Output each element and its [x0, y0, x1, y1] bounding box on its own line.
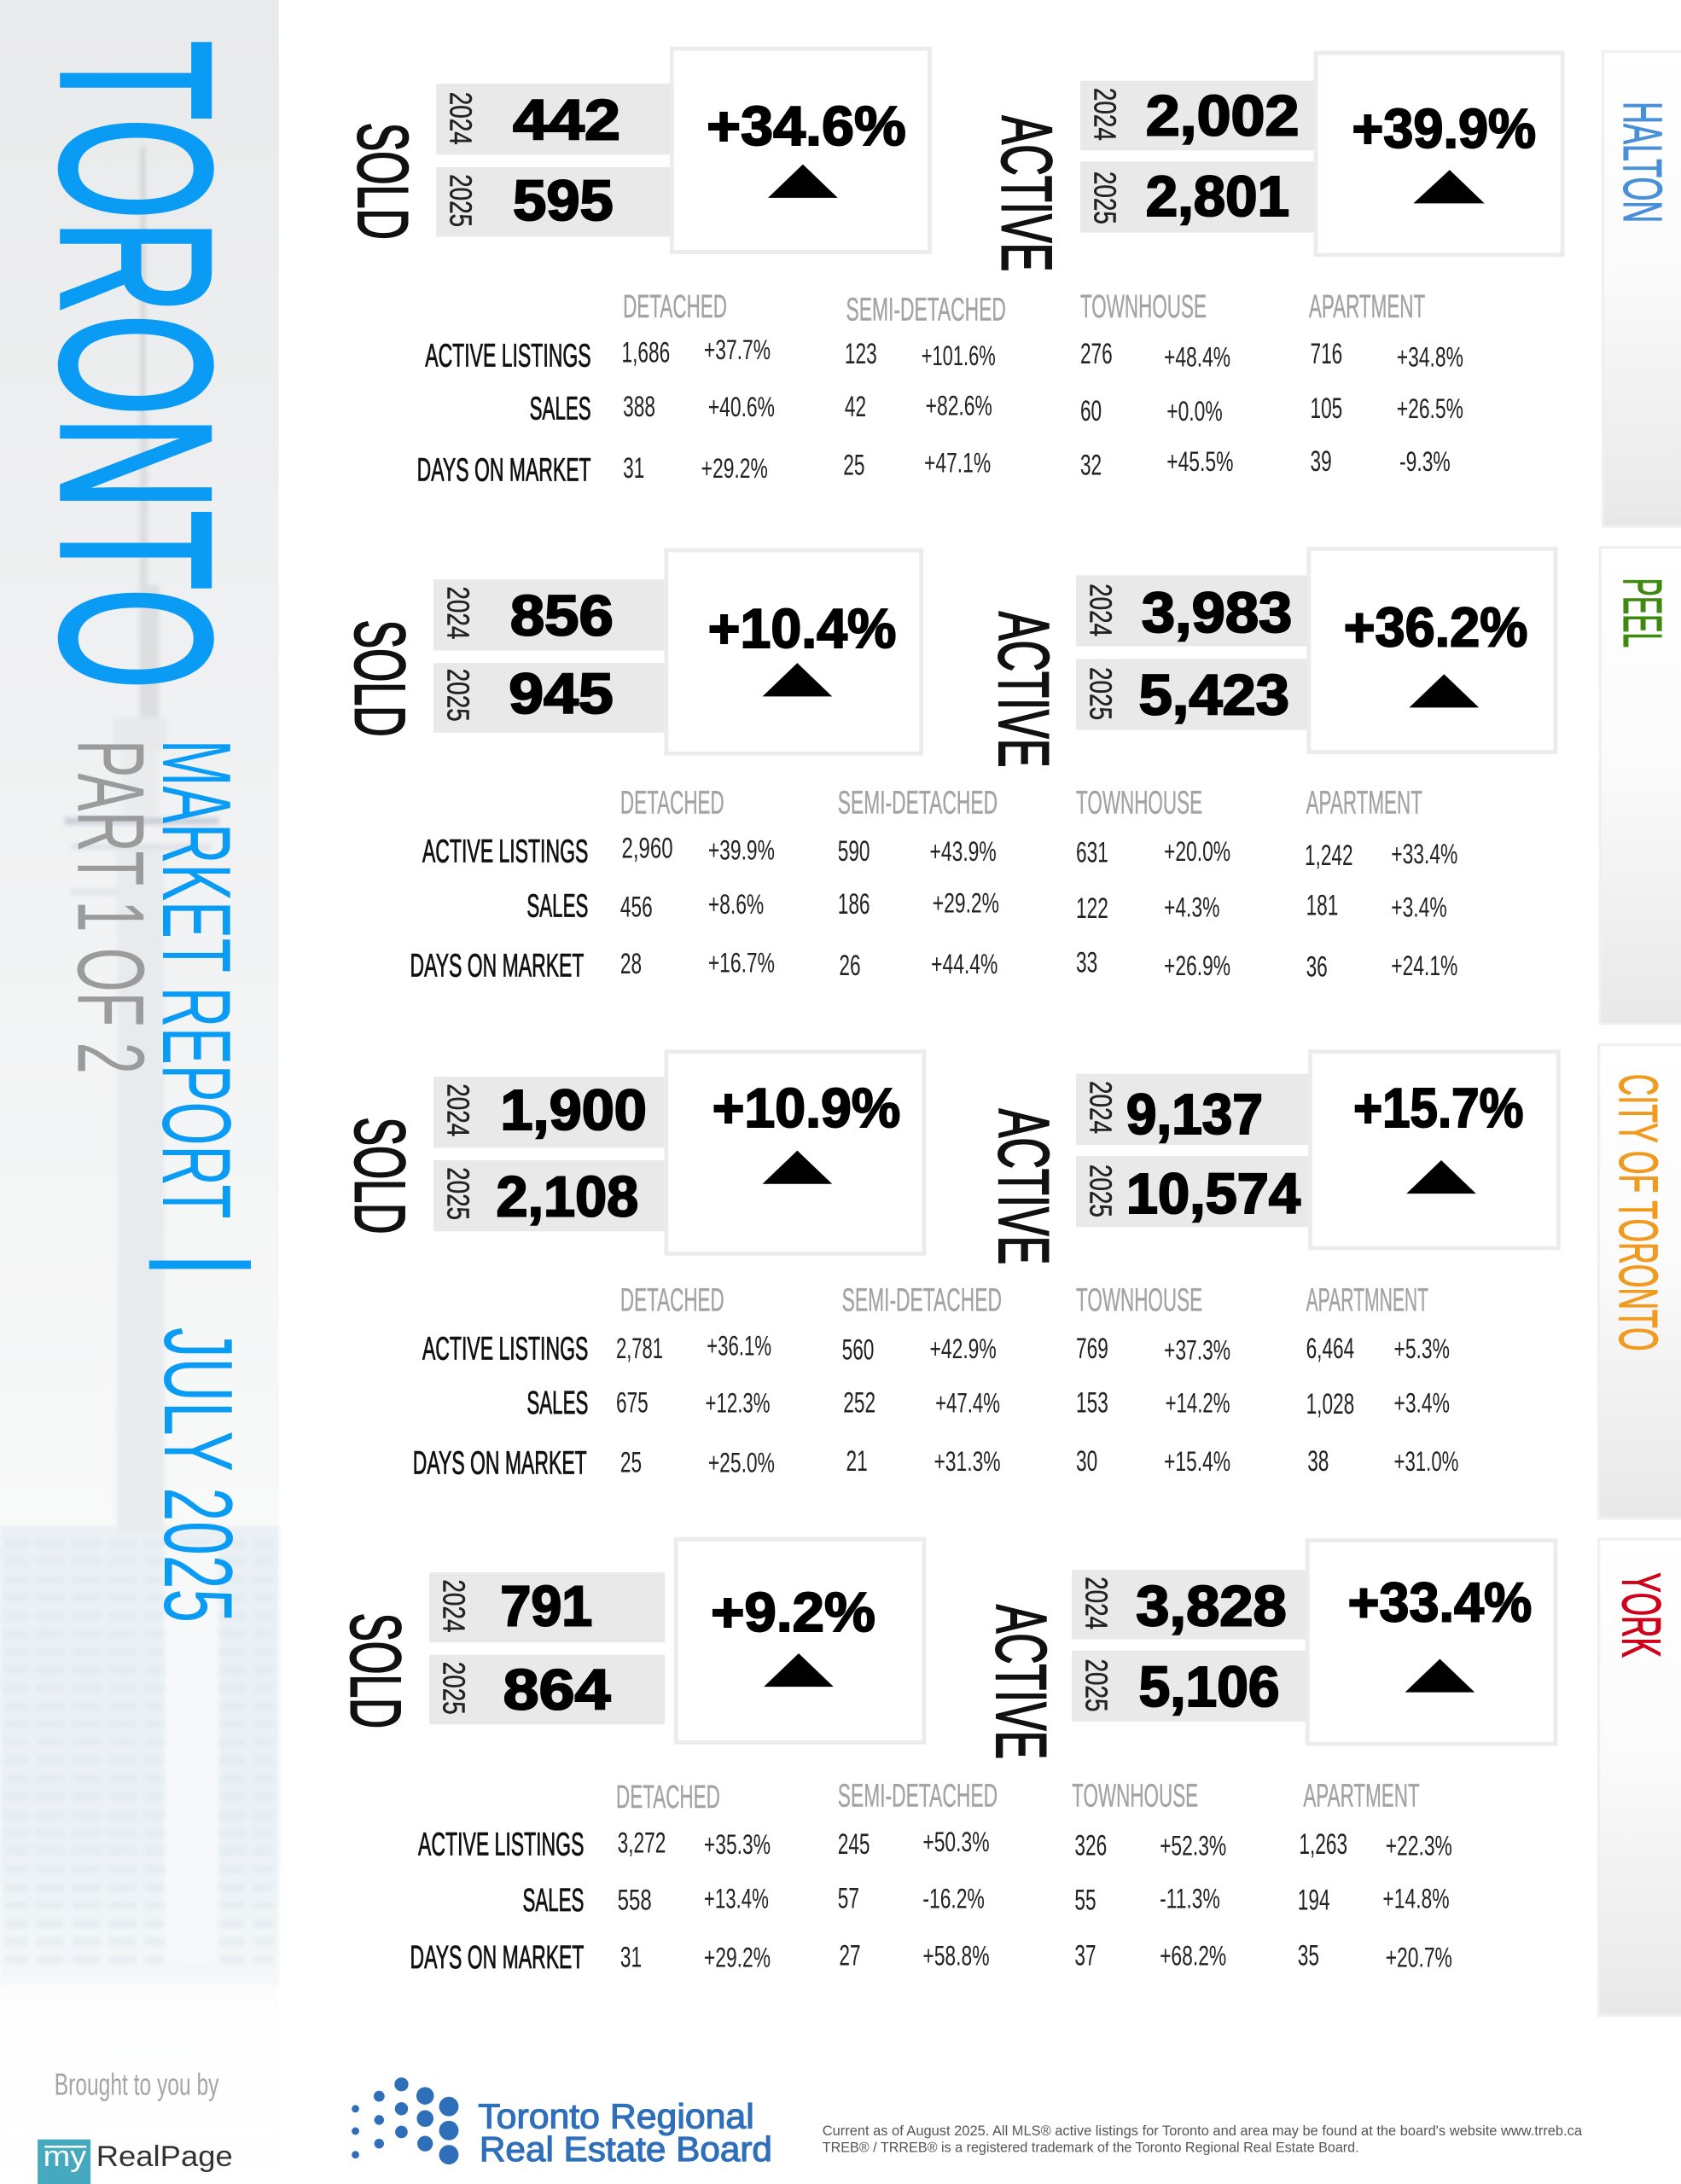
sold card: 791 — [500, 1574, 592, 1638]
table: property types: +12.3% — [706, 1387, 770, 1419]
active card: +36.2% — [1344, 596, 1527, 659]
region tab: York: YORK — [1610, 1572, 1671, 1658]
sold card: 2024 — [444, 92, 479, 145]
footnote: Current as of August 2025. All MLS® active listings for Toronto and area may be found at the board's website www.trreb.ca — [823, 2123, 1583, 2139]
table: property types: TOWNHOUSE — [1076, 1281, 1202, 1318]
active card: 2,801 — [1146, 165, 1289, 229]
table: property types: +26.5% — [1397, 392, 1463, 424]
sold card: 2024 — [436, 1579, 471, 1632]
sold card: 1,900 — [500, 1078, 647, 1142]
footnote — [823, 2123, 1583, 2155]
table: property types: -16.2% — [922, 1883, 985, 1914]
table: property types: 31 — [623, 452, 644, 485]
table: property types: 122 — [1076, 892, 1108, 925]
table: property types: +26.9% — [1164, 950, 1230, 981]
sold card: 595 — [513, 169, 614, 233]
active card: 3,828 — [1136, 1574, 1287, 1638]
active card — [986, 53, 1562, 271]
table: property types: 1,242 — [1305, 839, 1353, 872]
table: property types: 769 — [1076, 1333, 1108, 1365]
active card: ACTIVE — [981, 1605, 1061, 1759]
logo: myRealPage: my — [44, 2140, 87, 2173]
region tab: Halton — [1603, 51, 1681, 526]
table: property types: +31.0% — [1393, 1446, 1458, 1477]
image: blurred CN Tower — [64, 146, 218, 1532]
table: property types — [413, 1281, 1458, 1481]
table: property types: +14.2% — [1166, 1387, 1230, 1419]
table: property types: DAYS ON MARKET — [410, 948, 584, 984]
table: property types: DETACHED — [623, 288, 727, 325]
table: property types: DETACHED — [620, 1281, 724, 1318]
table: property types: 2,960 — [622, 833, 673, 865]
sold card: 945 — [509, 662, 614, 726]
sold card: +34.6% — [707, 95, 906, 157]
table: property types: +48.4% — [1164, 340, 1230, 372]
table: property types: 276 — [1080, 339, 1113, 370]
table: property types: 37 — [1074, 1940, 1096, 1972]
table: property types: +29.2% — [704, 1941, 771, 1972]
table: property types: 186 — [838, 889, 870, 921]
active card: 10,574 — [1126, 1162, 1300, 1226]
table: property types: 35 — [1298, 1940, 1319, 1972]
table: property types: +58.8% — [922, 1940, 990, 1972]
sold card — [336, 1539, 924, 1742]
table: property types: +34.8% — [1397, 340, 1463, 372]
table: property types: +35.3% — [704, 1828, 771, 1860]
active card — [981, 1541, 1556, 1759]
table: property types: APARTMENT — [1309, 288, 1425, 325]
table: property types: 42 — [845, 392, 866, 423]
active card: 2024 — [1083, 584, 1118, 636]
table: property types: +3.4% — [1391, 891, 1447, 922]
active card — [984, 1052, 1558, 1264]
table: property types: 123 — [845, 339, 877, 370]
table: property types: 33 — [1076, 947, 1097, 979]
sold card: SOLD — [336, 1613, 416, 1728]
panel: sidebar background with CN Tower — [0, 0, 279, 2184]
sold card: 2025 — [444, 174, 479, 227]
footer: brought to you by: Brought to you by — [55, 2067, 218, 2102]
divider bar — [149, 1261, 251, 1269]
table: property types: 558 — [618, 1884, 652, 1916]
table: property types: ACTIVE LISTINGS — [422, 834, 588, 869]
table: property types: +25.0% — [708, 1447, 775, 1478]
sold card: SOLD — [340, 1117, 420, 1234]
table: property types — [417, 288, 1463, 488]
sold card — [340, 1052, 924, 1253]
table: property types: 388 — [623, 392, 655, 423]
table: property types: DAYS ON MARKET — [413, 1445, 587, 1481]
table: property types: 39 — [1310, 445, 1332, 478]
active card: 2024 — [1079, 1577, 1114, 1629]
table: property types: 27 — [839, 1940, 861, 1972]
logo: myRealPage — [38, 2140, 233, 2184]
table: property types: TOWNHOUSE — [1076, 784, 1202, 821]
table: property types: SALES — [530, 390, 591, 427]
logo: Toronto Regional Real Estate Board — [352, 2077, 772, 2169]
table: property types: +4.3% — [1164, 891, 1219, 922]
active card: ACTIVE — [986, 116, 1067, 271]
sold card: 2025 — [440, 1167, 475, 1220]
table: property types: -11.3% — [1160, 1883, 1220, 1914]
table: property types: 25 — [843, 450, 864, 482]
active card: 2024 — [1087, 88, 1122, 141]
table: property types: +42.9% — [930, 1333, 997, 1364]
panel: Peel — [340, 548, 1681, 1024]
sold card: 2025 — [440, 669, 475, 722]
active card: ACTIVE — [984, 1109, 1063, 1264]
table: property types: 1,263 — [1299, 1829, 1347, 1861]
image: blurred city skyline — [0, 1526, 279, 2184]
table: property types: 57 — [838, 1883, 859, 1915]
table: property types: +3.4% — [1393, 1386, 1450, 1418]
subtitle: date: JULY 2025 — [143, 1327, 252, 1623]
table: property types: 181 — [1306, 890, 1338, 922]
table: property types: 675 — [616, 1387, 649, 1420]
sold card: 442 — [513, 88, 620, 152]
table: property types: 716 — [1310, 339, 1342, 370]
table: property types: 1,686 — [622, 337, 670, 369]
sold card: 856 — [510, 584, 614, 648]
table: property types: +50.3% — [922, 1826, 990, 1857]
sold card: +10.4% — [708, 597, 896, 659]
table: property types: +0.0% — [1166, 395, 1223, 427]
active card: 2025 — [1083, 667, 1118, 720]
table: property types: +5.3% — [1393, 1333, 1450, 1364]
sold card: 2,108 — [497, 1165, 638, 1228]
table: property types: 55 — [1074, 1885, 1096, 1917]
region tab: City of Toronto — [1599, 1044, 1681, 1519]
table: property types: DETACHED — [620, 784, 724, 821]
table: property types: +39.9% — [708, 834, 775, 865]
table: property types: +47.4% — [935, 1387, 1000, 1419]
table: property types: -9.3% — [1399, 445, 1451, 477]
logo: Toronto Regional Real Estate Board: Real Estate Board — [480, 2129, 772, 2169]
table: property types: 1,028 — [1306, 1389, 1354, 1420]
table: property types: 194 — [1298, 1885, 1330, 1917]
logo: Toronto Regional Real Estate Board: Toronto Regional — [478, 2097, 754, 2136]
table: property types — [410, 1776, 1452, 1975]
table: property types: +68.2% — [1160, 1940, 1226, 1972]
table: property types: +52.3% — [1160, 1830, 1226, 1862]
table: property types: +16.7% — [708, 946, 775, 979]
table: property types: +36.1% — [707, 1330, 771, 1362]
active card: 5,106 — [1139, 1655, 1280, 1719]
table: property types: ACTIVE LISTINGS — [425, 338, 591, 374]
logo: myRealPage: RealPage — [96, 2140, 233, 2173]
table: property types: TOWNHOUSE — [1080, 288, 1207, 325]
table: property types: 31 — [620, 1942, 642, 1974]
active card: 9,137 — [1126, 1083, 1263, 1147]
active card — [984, 549, 1556, 768]
table: property types: 28 — [620, 949, 642, 980]
table: property types: +44.4% — [931, 948, 998, 979]
table: property types: 2,781 — [616, 1333, 663, 1365]
table: property types: TOWNHOUSE — [1072, 1777, 1198, 1814]
table: property types: +82.6% — [926, 389, 992, 421]
table: property types: APARTMENT — [1303, 1777, 1420, 1814]
table: property types: 252 — [843, 1387, 875, 1420]
subtitle: market report: MARKET REPORT — [142, 740, 250, 1219]
sold card: 2024 — [440, 1083, 475, 1136]
table: property types: +37.7% — [704, 334, 771, 365]
table: property types: +40.6% — [708, 391, 775, 422]
active card: 2025 — [1083, 1165, 1118, 1217]
panel: City of Toronto — [340, 1044, 1681, 1519]
table: property types: DAYS ON MARKET — [410, 1939, 584, 1975]
table: property types: 456 — [620, 892, 653, 924]
table: property types: SEMI-DETACHED — [838, 1776, 998, 1814]
table: property types: +29.2% — [701, 452, 768, 484]
sold card: 2025 — [436, 1662, 471, 1715]
table: property types: +20.7% — [1386, 1941, 1452, 1972]
table: property types: 153 — [1076, 1387, 1108, 1420]
table: property types: 631 — [1076, 837, 1108, 869]
table: property types: 30 — [1076, 1446, 1097, 1478]
table: property types: 26 — [839, 950, 861, 982]
sold card — [343, 49, 930, 253]
table: property types: +22.3% — [1386, 1830, 1452, 1862]
table: property types: SEMI-DETACHED — [846, 290, 1006, 328]
sold card: SOLD — [340, 620, 420, 737]
table: property types: 32 — [1080, 450, 1102, 482]
active card: 3,983 — [1142, 581, 1292, 645]
panel: York — [336, 1539, 1681, 2015]
table: property types: SEMI-DETACHED — [838, 783, 998, 821]
active card: +33.4% — [1348, 1571, 1532, 1633]
sold card: SOLD — [343, 123, 422, 240]
table: property types: +24.1% — [1391, 950, 1457, 981]
table: property types: 6,464 — [1306, 1333, 1354, 1365]
table: property types: APARTMNENT — [1306, 1281, 1428, 1318]
title: TORONTO: TORONTO — [16, 40, 256, 689]
sold card: +9.2% — [711, 1581, 875, 1643]
region tab: Peel: PEEL — [1612, 578, 1672, 648]
active card: +39.9% — [1352, 97, 1536, 160]
table: property types: SEMI-DETACHED — [842, 1281, 1002, 1318]
table: property types: +37.3% — [1164, 1333, 1230, 1365]
table: property types: 36 — [1306, 951, 1328, 984]
sold card: 864 — [503, 1658, 610, 1722]
table: property types: SALES — [526, 887, 588, 924]
sold card — [340, 550, 922, 753]
table: property types: +101.6% — [922, 340, 996, 371]
region tab: Peel — [1600, 548, 1681, 1024]
table: property types: +47.1% — [924, 446, 991, 478]
table: property types — [410, 783, 1457, 984]
table: property types: +33.4% — [1391, 838, 1457, 869]
table: property types: 60 — [1080, 396, 1102, 427]
table: property types: +13.4% — [704, 1884, 769, 1914]
table: property types: SALES — [526, 1385, 588, 1421]
active card: 5,423 — [1139, 664, 1289, 728]
table: property types: ACTIVE LISTINGS — [422, 1331, 588, 1367]
table: property types: +29.2% — [933, 886, 999, 918]
panel: Halton — [343, 49, 1681, 526]
table: property types: +31.3% — [934, 1445, 1001, 1477]
active card: ACTIVE — [984, 612, 1063, 768]
active card: 2025 — [1079, 1658, 1114, 1712]
region tab: City of Toronto: CITY OF TORONTO — [1608, 1074, 1668, 1351]
table: property types: 560 — [842, 1334, 874, 1367]
table: property types: +20.0% — [1164, 835, 1230, 867]
table: property types: SALES — [523, 1882, 584, 1919]
region tab: Halton: HALTON — [1612, 102, 1672, 223]
sold card: 2024 — [440, 586, 475, 639]
table: property types: +8.6% — [708, 888, 764, 920]
table: property types: 326 — [1074, 1830, 1107, 1862]
sold card: +10.9% — [713, 1077, 900, 1139]
table: property types: 3,272 — [618, 1827, 666, 1860]
active card: 2024 — [1083, 1081, 1118, 1134]
table: property types: DETACHED — [616, 1779, 720, 1815]
active card: +15.7% — [1353, 1077, 1523, 1139]
table: property types: +15.4% — [1164, 1445, 1230, 1477]
table: property types: 38 — [1307, 1446, 1329, 1478]
table: property types: +43.9% — [930, 835, 997, 867]
table: property types: +14.8% — [1382, 1883, 1450, 1914]
footnote: TREB® / TRREB® is a registered trademark of the Toronto Regional Real Estate Board. — [823, 2140, 1359, 2155]
table: property types: +45.5% — [1166, 445, 1233, 477]
active card: 2025 — [1087, 171, 1122, 224]
table: property types: 21 — [846, 1446, 868, 1478]
subtitle: part 1 of 2: PART 1 OF 2 — [57, 740, 165, 1074]
icon: dot cluster — [352, 2077, 458, 2164]
active card: 2,002 — [1146, 84, 1299, 148]
table: property types: DAYS ON MARKET — [417, 451, 591, 488]
table: property types: 25 — [620, 1447, 642, 1479]
table: property types: 105 — [1310, 392, 1342, 425]
table: property types: APARTMENT — [1306, 784, 1422, 821]
table: property types: 245 — [838, 1829, 870, 1861]
table: property types: ACTIVE LISTINGS — [418, 1827, 584, 1862]
region tab: York — [1599, 1539, 1681, 2015]
table: property types: 590 — [838, 835, 870, 868]
